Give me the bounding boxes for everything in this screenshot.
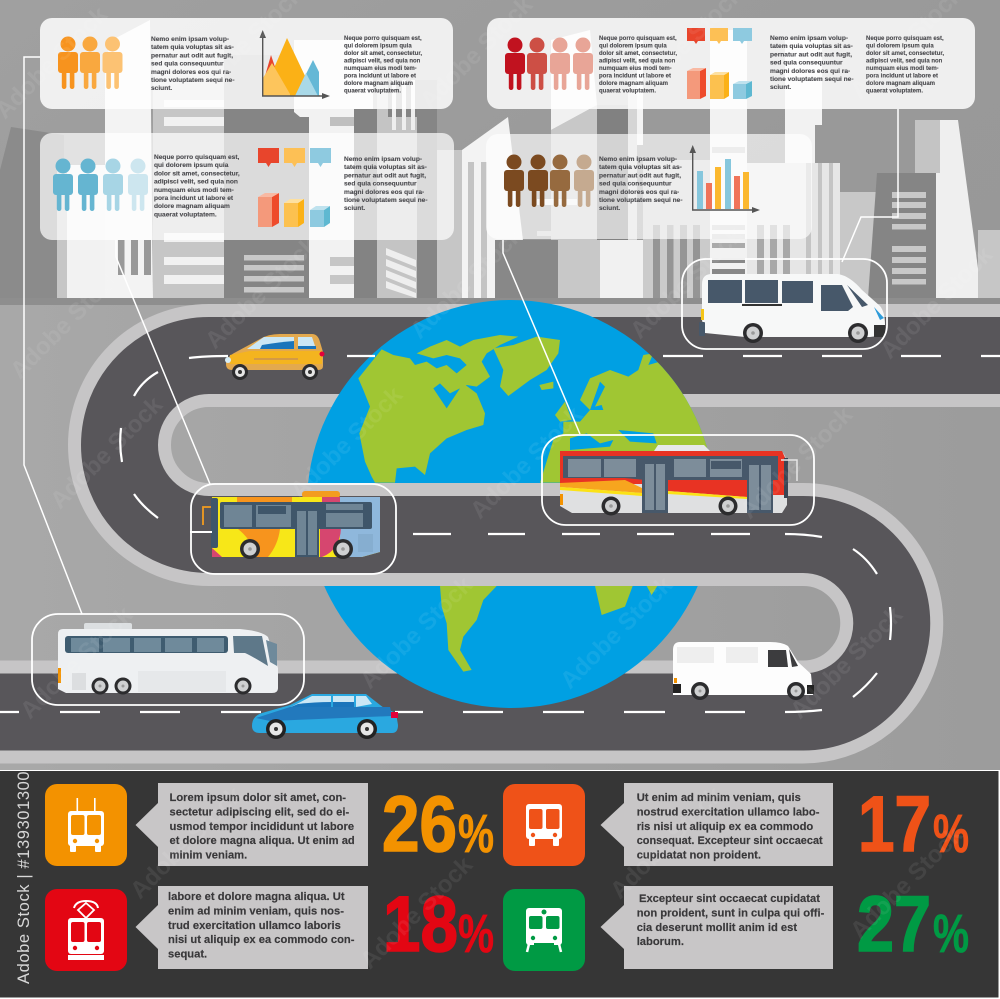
- watermark: Adobe Stock: [405, 221, 528, 344]
- bar chart: [690, 145, 760, 213]
- text block: magni dolores eos qui ra-: [151, 69, 231, 76]
- stat: 26%: 26: [382, 779, 457, 868]
- text block: dolore magnam aliquam: [154, 203, 230, 210]
- watermark: Adobe Stock: [735, 401, 858, 524]
- text block: adipisci velit, sed quia non: [599, 58, 676, 64]
- watermark: Adobe Stock: [845, 821, 968, 944]
- callout: lorem ipsum: et dolore magna aliqua. Ut enim ad: [170, 835, 355, 847]
- callout: lorem ipsum: usmod tempor incididunt ut labore: [170, 821, 354, 833]
- text block: quaerat voluptatem.: [344, 88, 401, 94]
- text block: tatem quia voluptas sit as-: [599, 164, 682, 171]
- text block: magni dolores eos qui ra-: [344, 189, 424, 196]
- text block: numquam eius modi tem-: [344, 66, 417, 72]
- vehicle: white van: [673, 642, 814, 700]
- middle road over globe: [209, 483, 803, 586]
- text block: pora incidunt ut labore et: [344, 74, 416, 80]
- text block: dolor sit amet, consectetur,: [344, 51, 422, 57]
- icon: red tram: [45, 889, 127, 971]
- watermark: Adobe Stock: [875, 241, 998, 364]
- callout: lorem ipsum: minim veniam.: [170, 850, 247, 862]
- text block: magni dolores eos qui ra-: [770, 68, 850, 75]
- text block: tatem quia voluptas sit as-: [151, 44, 234, 51]
- stock id label: Adobe Stock | #139301300: [15, 771, 33, 984]
- ground: [0, 298, 1000, 770]
- text block: dolor sit amet, consectetur,: [866, 51, 944, 57]
- text block: Neque porro quisquam est,: [599, 36, 677, 42]
- text block: dolor sit amet, consectetur,: [599, 51, 677, 57]
- connector lines: [24, 57, 898, 614]
- watermark: Adobe Stock: [45, 391, 168, 514]
- text block: numquam eius modi tem-: [599, 66, 672, 72]
- watermark: Adobe Stock: [5, 261, 128, 384]
- text block: tione voluptatem sequi ne-: [344, 197, 428, 204]
- vehicle: colourful bus: [190, 491, 380, 559]
- stat: 18%: 18: [383, 879, 458, 968]
- vehicle: yellow car: [225, 334, 324, 380]
- watermark: Adobe Stock: [555, 571, 678, 694]
- callout: labore et dolore: nisi ut aliquip ex ea commodo con-: [168, 934, 355, 946]
- text block: sciunt.: [770, 84, 791, 91]
- text block: dolore magnam aliquam: [599, 81, 668, 87]
- icon: orange bus: [503, 784, 585, 866]
- text block: pora incidunt ut labore et: [154, 195, 234, 202]
- text block: sed quia consequuntur: [599, 181, 672, 188]
- globe: [307, 300, 717, 708]
- icon: green train: [503, 889, 585, 971]
- callout: excepteur: laborum.: [637, 936, 684, 948]
- text block: tatem quia voluptas sit as-: [344, 164, 427, 171]
- watermark: Adobe Stock: [125, 781, 248, 904]
- callout: excepteur: non proident, sunt in culpa qui offi-: [637, 907, 825, 919]
- icon: blue people: [53, 158, 148, 211]
- text block: quaerat voluptatem.: [154, 211, 217, 218]
- text block: sed quia consequuntur: [151, 61, 224, 68]
- watermark: Adobe Stock: [15, 601, 138, 724]
- city skyline: [0, 20, 1000, 298]
- watermark: Adobe Stock: [355, 851, 478, 974]
- text block: sciunt.: [151, 85, 172, 92]
- callout: excepteur: [600, 886, 833, 969]
- callout: lorem ipsum: Lorem ipsum dolor sit amet, con-: [170, 792, 346, 804]
- text block: tione voluptatem sequi ne-: [770, 76, 854, 83]
- stat: 17%: %: [933, 804, 969, 864]
- winding road: [0, 356, 1000, 712]
- text block: magni dolores eos qui ra-: [599, 189, 679, 196]
- icon: orange people: [58, 36, 122, 89]
- text block: quaerat voluptatem.: [866, 88, 923, 94]
- text block: pora incidunt ut labore et: [866, 74, 938, 80]
- callout: excepteur: cia deserunt mollit anim id est: [637, 922, 797, 934]
- text block: adipisci velit, sed quia non: [344, 58, 421, 64]
- background: [0, 0, 1000, 770]
- watermark: Adobe Stock: [285, 381, 408, 504]
- text block: quaerat voluptatem.: [599, 88, 656, 94]
- panel: blue people and 3D bars: [40, 133, 454, 240]
- icon: brown people: [504, 154, 594, 207]
- text block: Neque porro quisquam est,: [154, 154, 240, 161]
- callout: ut enim: ris nisi ut aliquip ex ea commodo: [637, 821, 813, 833]
- vehicle: white coach: [58, 623, 278, 694]
- text block: pernatur aut odit aut fugit,: [599, 172, 681, 179]
- text block: pora incidunt ut labore et: [599, 74, 671, 80]
- callout: excepteur: Excepteur sint occaecat cupidatat: [639, 893, 820, 905]
- callout: ut enim: consequat. Excepteur sint occaecat: [637, 835, 823, 847]
- continents: [358, 335, 717, 672]
- callout: ut enim: Ut enim ad minim veniam, quis: [637, 792, 801, 804]
- icon: orange trolleybus: [45, 784, 127, 866]
- panel: orange people and mountain chart: [40, 18, 453, 109]
- text block: Nemo enim ipsam volup-: [770, 35, 848, 42]
- text block: tione voluptatem sequi ne-: [599, 197, 683, 204]
- callout: lorem ipsum: sectetur adipiscing elit, sed do ei-: [170, 806, 349, 818]
- 3D bar chart with flags: [258, 148, 331, 227]
- watermark: Adobe Stock: [785, 601, 908, 724]
- text block: qui dolorem ipsum quia: [866, 44, 934, 50]
- text block: tatem quia voluptas sit as-: [770, 43, 853, 50]
- stat: 18%: %: [458, 904, 494, 964]
- vehicle: red bus: [560, 445, 797, 516]
- panel: brown people and bar chart: [486, 134, 812, 239]
- text block: pernatur aut odit aut fugit,: [344, 172, 426, 179]
- text block: sed quia consequuntur: [770, 60, 843, 67]
- text block: Nemo enim ipsam volup-: [344, 156, 422, 163]
- watermark: Adobe Stock: [625, 221, 748, 344]
- callout: labore et dolore: [136, 886, 368, 969]
- callout: ut enim: cupidatat non proident.: [637, 850, 761, 862]
- text block: adipisci velit, sed quia non: [866, 58, 943, 64]
- callout: ut enim: [600, 783, 833, 866]
- text block: Neque porro quisquam est,: [866, 36, 944, 42]
- text block: pernatur aut odit aut fugit,: [770, 51, 852, 58]
- 3D bar chart with flags: [687, 28, 752, 99]
- text block: numquam eius modi tem-: [866, 66, 939, 72]
- text block: sciunt.: [344, 205, 365, 212]
- text block: qui dolorem ipsum quia: [599, 44, 667, 50]
- callout: lorem ipsum: [136, 783, 368, 866]
- watermark: Adobe Stock: [200, 231, 323, 354]
- text block: qui dolorem ipsum quia: [154, 162, 229, 169]
- text block: numquam eius modi tem-: [154, 187, 234, 194]
- text block: sciunt.: [599, 205, 620, 212]
- stat: 27%: %: [933, 904, 969, 964]
- text block: pernatur aut odit aut fugit,: [151, 52, 233, 59]
- text block: adipisci velit, sed quia non: [154, 179, 238, 186]
- road lane markings: [0, 356, 1000, 712]
- callout: labore et dolore: labore et dolore magna aliqua. Ut: [168, 891, 345, 903]
- watermark: Adobe Stock: [355, 571, 478, 694]
- callout: ut enim: nostrud exercitation ullamco labo-: [637, 806, 820, 818]
- stat: 26%: %: [458, 804, 494, 864]
- panel: statistics footer: [0, 771, 998, 998]
- text block: qui dolorem ipsum quia: [344, 44, 412, 50]
- panel: red people and 3D bars: [487, 18, 975, 109]
- text block: Nemo enim ipsam volup-: [151, 36, 229, 43]
- text block: tione voluptatem sequi ne-: [151, 77, 235, 84]
- text block: Neque porro quisquam est,: [344, 36, 422, 42]
- vehicle: white minibus: [699, 274, 885, 343]
- vehicle: blue car: [252, 694, 398, 739]
- text block: dolor sit amet, consectetur,: [154, 170, 240, 177]
- text block: sed quia consequuntur: [344, 181, 417, 188]
- stat: 17%: 17: [858, 779, 931, 868]
- stat: 27%: 27: [857, 879, 931, 968]
- mountain chart: [260, 30, 330, 99]
- vehicle highlight frames: [32, 259, 887, 705]
- watermark: Adobe Stock: [465, 401, 588, 524]
- callout: labore et dolore: trud exercitation ullamco laboris: [168, 920, 341, 932]
- text block: dolore magnam aliquam: [866, 81, 935, 87]
- callout: labore et dolore: sequat.: [168, 949, 207, 961]
- text block: Nemo enim ipsam volup-: [599, 156, 677, 163]
- text block: dolore magnam aliquam: [344, 81, 413, 87]
- icon: red people: [505, 38, 593, 90]
- watermark: Adobe Stock: [605, 781, 728, 904]
- callout: labore et dolore: enim ad minim veniam, quis nos-: [168, 905, 344, 917]
